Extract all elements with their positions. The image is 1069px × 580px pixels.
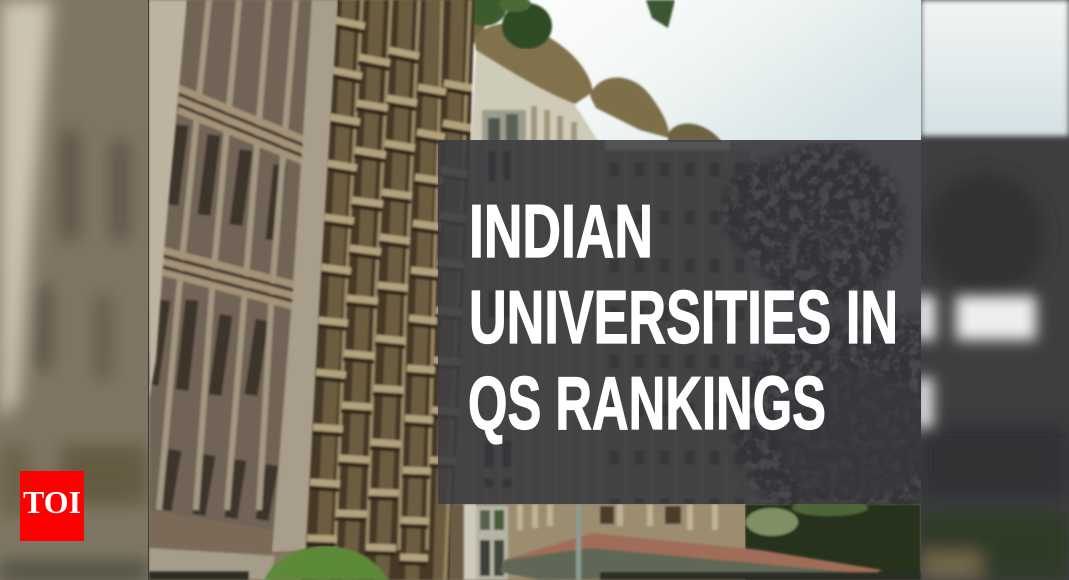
- grid verticals: [335, 0, 470, 580]
- louvre bands: [162, 88, 305, 307]
- grid ledges: [307, 20, 472, 558]
- vertical fins: [159, 0, 296, 510]
- cell lighting: [322, 0, 458, 580]
- main pillar: [272, 0, 338, 552]
- roof domes: [403, 0, 722, 142]
- photo: campus building: [149, 0, 960, 580]
- left wing with fins: [149, 0, 312, 580]
- blurred repeat of title: [915, 296, 1036, 428]
- title: UNIVERSITIES IN: [469, 275, 898, 359]
- upper wall and window: [470, 48, 598, 140]
- dark title panel: [438, 140, 921, 504]
- pavilion roof: [500, 504, 921, 580]
- tree core shade: [780, 372, 921, 498]
- green tree lower right: [745, 500, 921, 580]
- pale sky behind panel: [730, 140, 921, 160]
- dark tree silhouettes: [721, 143, 921, 506]
- leaves: [463, 0, 675, 49]
- left blurred backdrop: [0, 0, 148, 580]
- plinth: [149, 510, 272, 555]
- mid-block facade seen through panel: [470, 140, 750, 504]
- left pale pillar: [149, 0, 187, 400]
- TOI logo: [20, 471, 84, 541]
- grid facade: [300, 0, 475, 580]
- TOI logo: TOI: [23, 484, 81, 520]
- sky: [470, 0, 921, 160]
- lower building strip: [450, 504, 921, 580]
- blurred sky: [921, 0, 1069, 136]
- dark window slots: [152, 125, 280, 520]
- green bush: [264, 546, 388, 580]
- title: QS RANKINGS: [468, 361, 826, 445]
- title: INDIAN: [469, 189, 653, 273]
- title: [468, 189, 898, 445]
- right blurred backdrop: [915, 0, 1069, 580]
- ledge shadows: [306, 26, 471, 564]
